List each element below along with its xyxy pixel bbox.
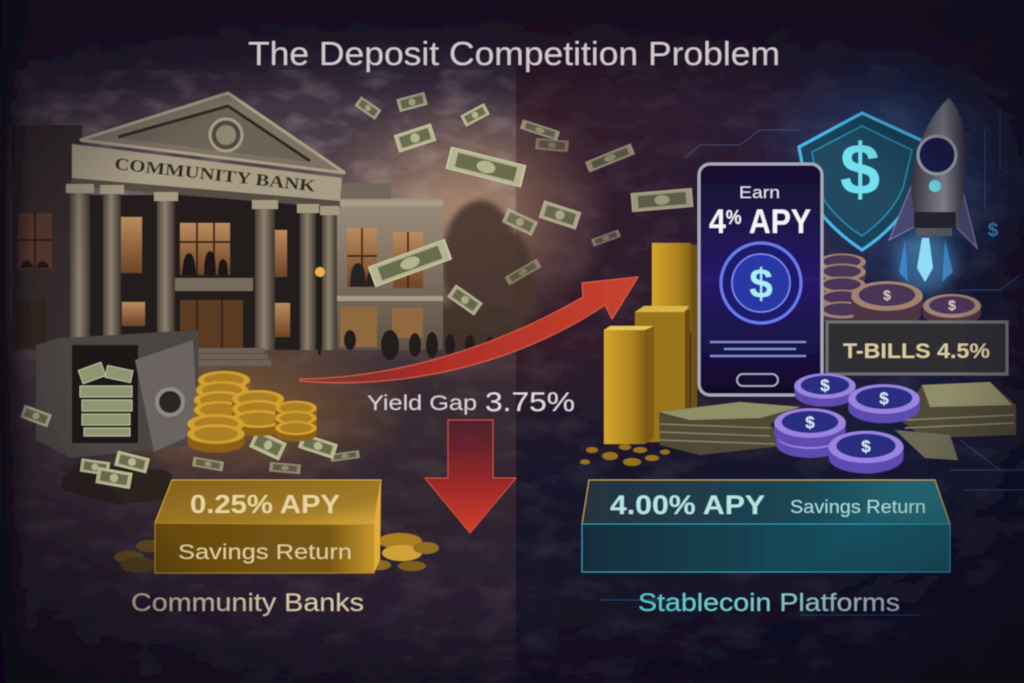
bank name sign: COMMUNITY BANK <box>114 154 317 196</box>
red curved arrow toward stablecoin platforms <box>300 277 638 383</box>
label: savings return: Savings Return <box>790 497 926 517</box>
heading: community banks: Community Banks <box>131 589 364 617</box>
coin stack behind t-bills plate: $ <box>948 297 956 313</box>
stat: 0.25% APY: 0.25% APY <box>190 489 340 519</box>
illustration: community bank building <box>12 93 495 366</box>
icon: purple stablecoins: $ <box>861 437 871 456</box>
icon: dollar coin: $ <box>749 260 773 307</box>
icon: purple stablecoins: $ <box>805 413 815 432</box>
stack of cash <box>659 402 800 455</box>
icon: rocket with flames <box>889 98 999 292</box>
icon: gold coin stacks <box>187 371 317 453</box>
decorative circuit lines <box>600 110 1024 615</box>
columns <box>70 190 337 350</box>
icon: purple stablecoins: $ <box>879 389 889 408</box>
icon: neon shield with dollar: $ <box>840 130 880 210</box>
label plate: t-bills 4.5%: T-BILLS 4.5% <box>843 340 990 363</box>
icon: neon shield with dollar <box>799 113 925 250</box>
heading: stablecoin platforms: Stablecoin Platforms <box>638 589 900 617</box>
coin stack behind t-bills plate: $ <box>883 287 891 303</box>
label: yield gap <box>367 387 575 417</box>
icon: smartphone earn 4% apy <box>699 164 822 395</box>
panel: teal savings bar, stablecoin platforms <box>582 480 950 572</box>
left wing <box>12 125 82 350</box>
pediment <box>70 93 345 208</box>
red down arrow <box>425 420 516 533</box>
gold coin pile under bars <box>580 444 670 466</box>
column capitals <box>66 184 339 215</box>
icon: open vault safe with cash <box>36 330 200 458</box>
icon: purple stablecoins <box>774 373 920 473</box>
windows and doors <box>120 217 290 348</box>
entrance steps <box>185 348 271 366</box>
stat: 4.00% apy: 4.00% APY <box>610 490 765 520</box>
porch interior <box>70 195 335 350</box>
label: yield gap: 3.75% <box>485 387 575 417</box>
coin stack behind t-bills plate <box>818 254 981 328</box>
label: savings return: Savings Return <box>178 541 352 564</box>
right wing <box>335 183 443 350</box>
trees behind bank <box>440 200 534 350</box>
text: earn: Earn <box>739 183 780 202</box>
label: yield gap: Yield Gap <box>367 392 477 415</box>
coins beside gold savings bar <box>114 533 439 573</box>
title: The Deposit Competition Problem <box>248 35 780 72</box>
stat: 4% apy: % <box>726 207 742 229</box>
panel: gold savings bar, community banks <box>155 480 381 573</box>
stat: 4% apy: APY <box>742 203 811 241</box>
icon: dollar coin <box>721 243 801 323</box>
icon: purple stablecoins: $ <box>820 376 830 395</box>
label plate: t-bills 4.5% <box>827 322 1007 374</box>
stat: 4% apy: 4 <box>709 203 728 241</box>
street lamp <box>315 267 325 355</box>
cash stacks near vault <box>21 405 359 505</box>
flying dollar bills <box>355 92 693 315</box>
icon: rocket with flames: $ <box>988 220 999 241</box>
people queue <box>344 330 495 360</box>
cash stack right <box>895 382 1016 460</box>
gold bar chart <box>604 243 697 444</box>
